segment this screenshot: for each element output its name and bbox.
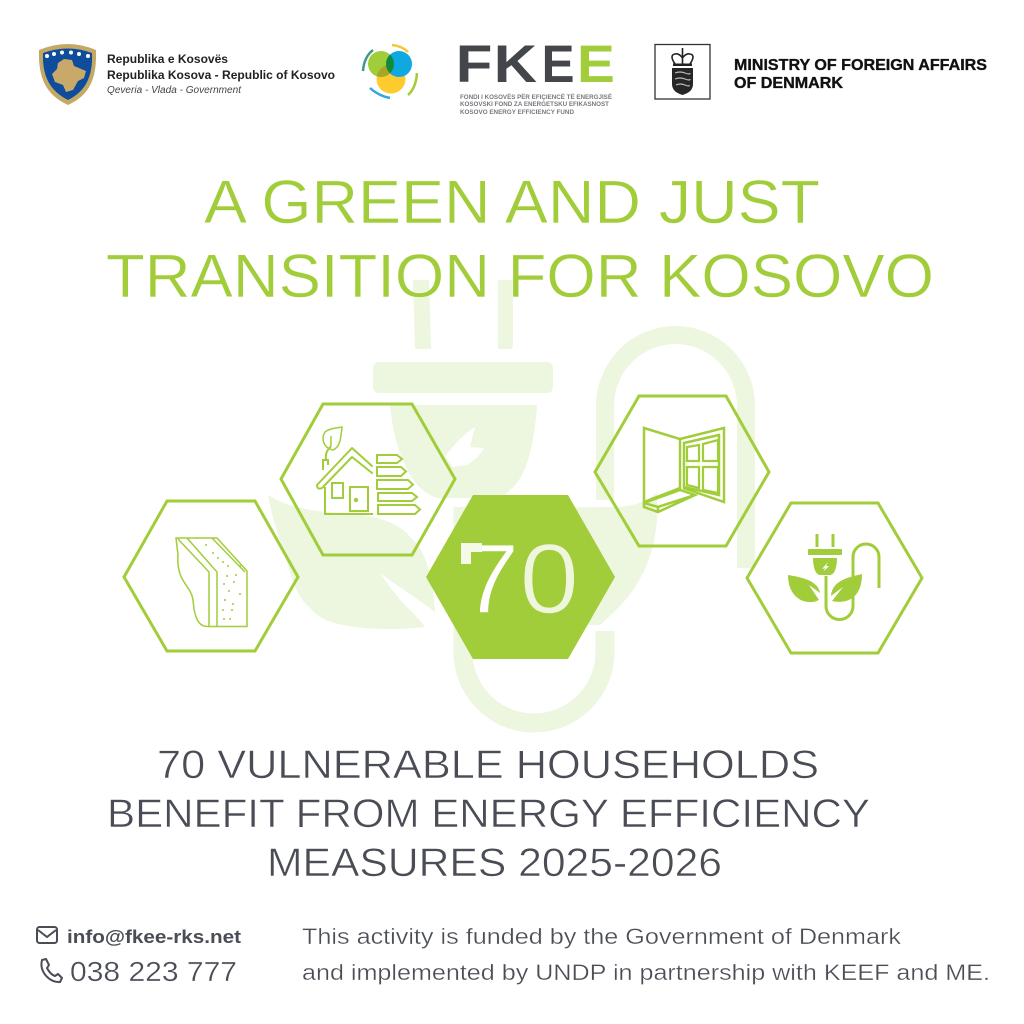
hexagon: energy-rated house <box>281 404 455 555</box>
logo letters: E <box>542 34 574 93</box>
plug body <box>390 405 537 498</box>
subtitle: MEASURES 2025-2026 <box>267 841 722 885</box>
icon: envelope <box>37 927 57 943</box>
plug head <box>373 362 553 393</box>
logo tagline: KOSOVO ENERGY EFFICIENCY FUND <box>460 109 574 116</box>
icon: open window <box>644 428 724 512</box>
logo tagline <box>460 93 613 116</box>
email: info@fkee-rks.net <box>67 927 241 947</box>
hexagon: window <box>595 396 769 546</box>
icon: insulated wall <box>176 538 247 626</box>
ministry name: MINISTRY OF FOREIGN AFFAIRS <box>734 57 987 74</box>
icon: Danish crest <box>655 44 710 99</box>
funding statement: This activity is funded by the Government of Denmark <box>302 924 902 949</box>
logo text: Kosovo government <box>107 54 335 96</box>
logo: Republic of Kosovo <box>39 44 335 105</box>
phone number: 038 223 777 <box>70 956 237 987</box>
subtitle <box>107 743 870 885</box>
funding statement: and implemented by UNDP in partnership with KEEF and ME. <box>302 960 990 985</box>
title: TRANSITION FOR KOSOVO <box>106 242 934 310</box>
left leaf <box>268 495 435 629</box>
icon: phone <box>41 959 62 982</box>
cord upper loop <box>605 335 746 568</box>
title: A GREEN AND JUST <box>204 168 820 236</box>
number 70: 70 <box>460 523 579 634</box>
logo letters: F <box>456 34 492 93</box>
logo: Ministry of Foreign Affairs of Denmark <box>655 44 987 99</box>
subtitle: BENEFIT FROM ENERGY EFFICIENCY <box>107 792 870 836</box>
icon: house with energy rating <box>317 427 420 514</box>
logo tagline: FONDI I KOSOVËS PËR EFIÇIENCË TË ENERGJISË <box>460 93 613 101</box>
logo: overlapping circles <box>363 45 417 98</box>
hexagon: centre number 70 <box>426 495 615 659</box>
hexagon: green plug <box>747 503 922 653</box>
logo text: Kosovo government: Republika Kosova - Republic of Kosovo <box>107 70 335 82</box>
cord lower loop <box>463 507 605 723</box>
plug prongs <box>413 280 513 349</box>
ministry name <box>734 57 987 92</box>
icon: plug with leaves <box>788 534 879 620</box>
logo letters: E <box>577 34 615 94</box>
contact details <box>37 927 241 987</box>
logo text: Kosovo government: Qeveria - Vlada - Government <box>107 85 242 96</box>
right leaf <box>470 492 657 625</box>
ministry name: OF DENMARK <box>734 75 843 92</box>
logo tagline: KOSOVSKI FOND ZA ENERGETSKU EFIKASNOST <box>460 101 609 108</box>
logo letters <box>456 34 615 94</box>
logo text: Kosovo government: Republika e Kosovës <box>107 54 228 66</box>
logo letters: K <box>494 34 537 93</box>
logo: FKEE <box>456 34 615 116</box>
hexagon: wall insulation <box>124 501 298 651</box>
subtitle: 70 VULNERABLE HOUSEHOLDS <box>157 743 819 787</box>
funding statement <box>302 924 990 985</box>
icon: Kosovo coat of arms <box>39 44 96 105</box>
title <box>106 168 934 310</box>
watermark: plug with leaves <box>268 280 746 723</box>
